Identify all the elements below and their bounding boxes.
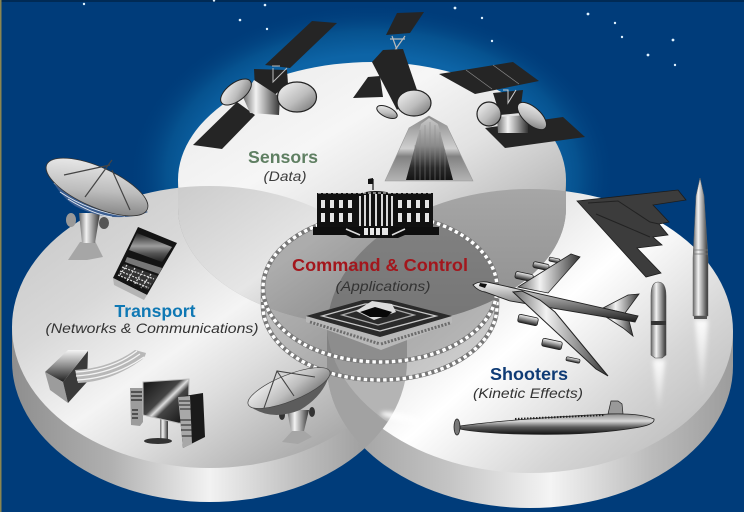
panel: transport disc [12,186,407,502]
label: Command and Control: (Applications) [336,278,430,294]
icon: tall missile [693,178,708,319]
icon: satellite left [193,21,337,149]
icon: stealth bomber [577,190,686,277]
label: Command and Control [292,255,468,294]
label: Command and Control: Command & Control [292,255,468,275]
icon: satellite right [439,62,585,148]
icon: small missile [651,282,666,358]
icon: White House [313,178,439,238]
icon: satellite center [353,12,431,121]
panel: sensors disc [178,62,566,319]
label: Shooters: (Kinetic Effects) [473,385,583,401]
icon: tall missile plume [695,320,708,398]
icon: smartphone [113,227,177,300]
icon: small missile plume [653,360,665,414]
panel: command and control disc [263,214,497,380]
icon: large dish antenna left [39,146,155,260]
label: Sensors: (Data) [264,168,306,184]
label: Transport: Transport [114,301,196,321]
icon: Pentagon [306,300,452,350]
label: Transport [46,301,258,336]
stars [83,0,676,66]
icon: radar pyramid [385,116,473,181]
icon: submarine [454,401,654,435]
icon: desktop computer [130,379,205,448]
label: Sensors: Sensors [248,147,318,167]
icon: fiber optic cube [45,350,146,403]
label: Sensors [248,147,318,184]
icon: dish antenna lower [243,359,335,444]
panel: shooters disc [320,189,733,510]
label: Shooters: Shooters [490,364,568,384]
icon: bomber aircraft [473,254,639,376]
label: Transport: (Networks & Communications) [46,320,258,336]
label: Shooters [473,364,583,401]
